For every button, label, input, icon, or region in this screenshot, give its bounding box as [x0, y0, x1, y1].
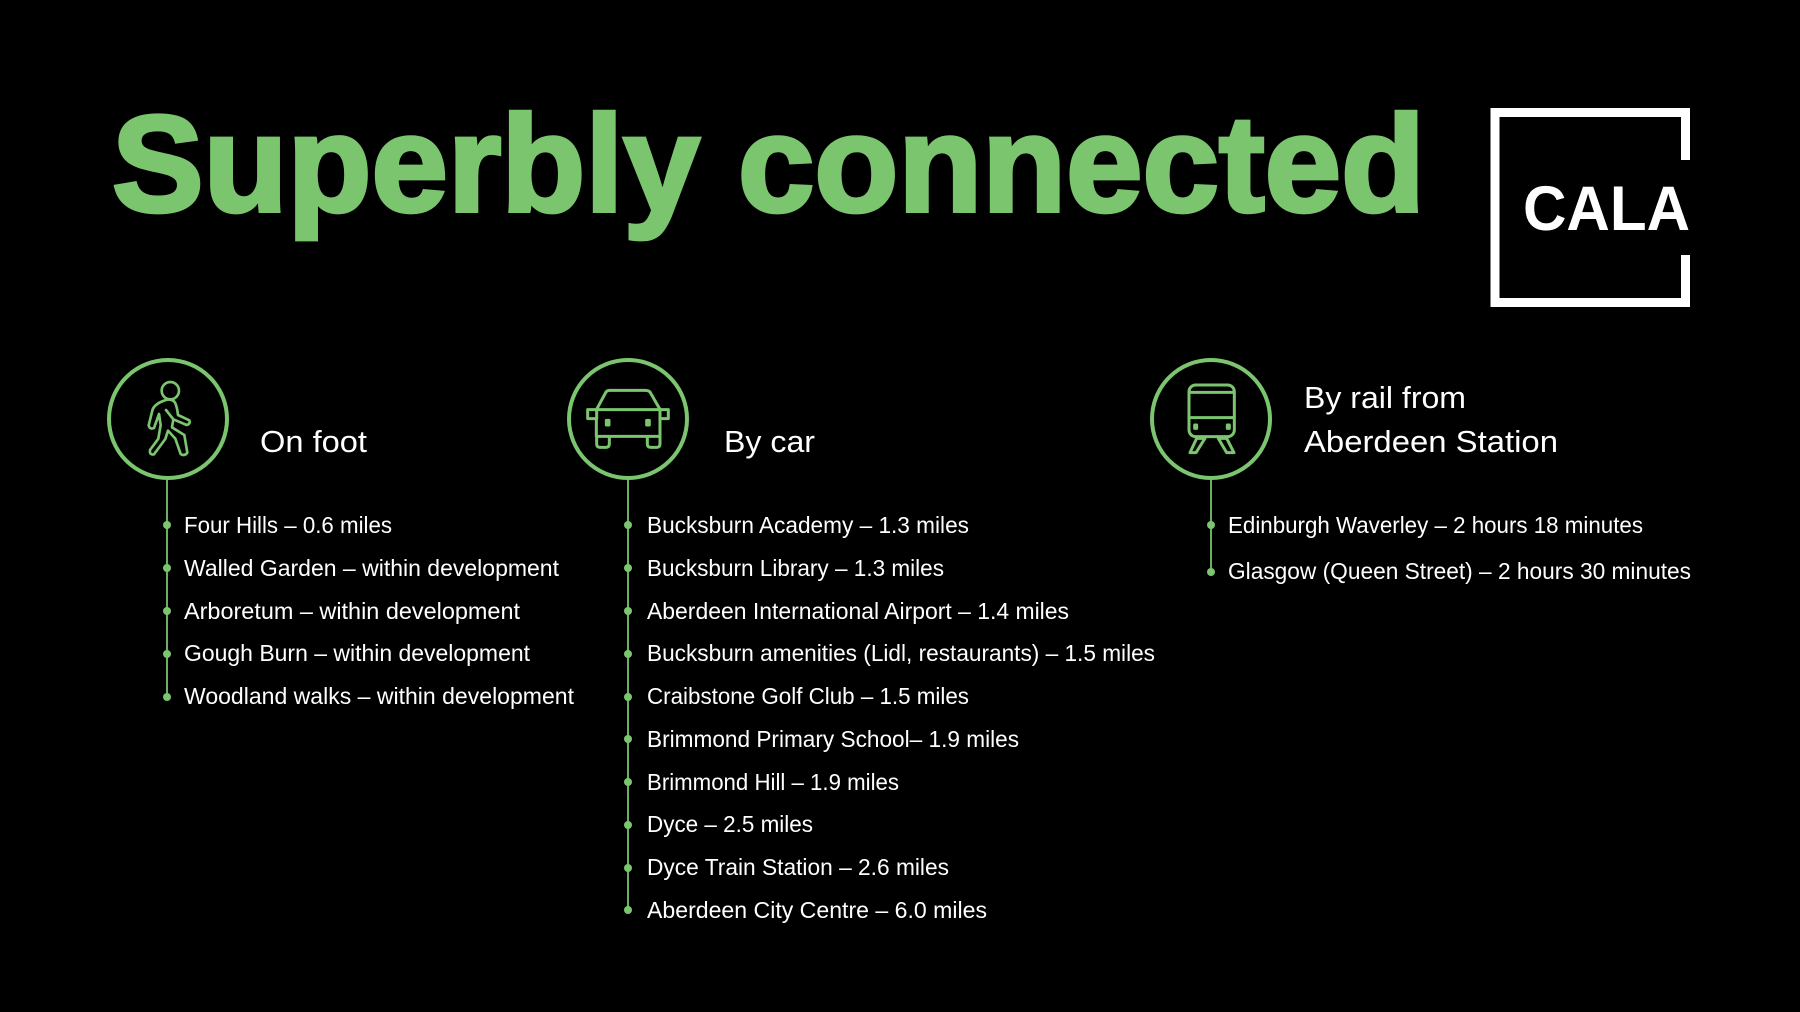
heading: by car: By car: [724, 424, 815, 459]
list: by car destinations: Bucksburn amenities (Lidl, restaurants) – 1.5 miles: [647, 640, 1155, 666]
list: on foot destinations: Woodland walks – within development: [184, 683, 575, 709]
list: by car destinations: Brimmond Hill – 1.9 miles: [647, 769, 899, 795]
list: on foot destinations: Four Hills – 0.6 miles: [184, 512, 392, 538]
list: on foot destinations: Arboretum – within development: [184, 598, 521, 624]
list: by car destinations: Aberdeen International Airport – 1.4 miles: [647, 598, 1069, 624]
heading: by rail: Aberdeen Station: [1304, 424, 1558, 459]
list: by car destinations: Bucksburn Academy – 1.3 miles: [647, 512, 969, 538]
logo: CALA: CALA: [1523, 174, 1690, 244]
list: by car destinations: Brimmond Primary School– 1.9 miles: [647, 726, 1019, 752]
list: on foot destinations: Walled Garden – within development: [184, 555, 560, 581]
list: rail destinations: Glasgow (Queen Street) – 2 hours 30 minutes: [1228, 558, 1691, 584]
panel: by rail: [1152, 360, 1691, 584]
icon: train: [1152, 360, 1270, 478]
list: by car destinations: Craibstone Golf Club – 1.5 miles: [647, 683, 969, 709]
timeline: by rail: [1207, 480, 1215, 576]
heading: on foot: On foot: [260, 424, 367, 459]
title: Superbly connected: [112, 88, 1425, 241]
heading: by rail: [1304, 380, 1558, 459]
list: by car destinations: Dyce – 2.5 miles: [647, 811, 813, 837]
panel: by car: [569, 360, 1155, 923]
list: by car destinations: [647, 512, 1155, 923]
icon: car: [569, 360, 687, 478]
timeline: by car: [624, 480, 632, 914]
list: rail destinations: [1228, 512, 1691, 584]
list: rail destinations: Edinburgh Waverley – 2 hours 18 minutes: [1228, 512, 1643, 538]
list: on foot destinations: [184, 512, 575, 709]
list: by car destinations: Aberdeen City Centre – 6.0 miles: [647, 897, 987, 923]
panel: on foot: [109, 360, 575, 709]
heading: by rail: By rail from: [1304, 380, 1466, 415]
list: on foot destinations: Gough Burn – within development: [184, 640, 531, 666]
icon: walking person: [109, 360, 227, 478]
logo: CALA: [1495, 112, 1690, 302]
timeline: on foot: [163, 480, 171, 701]
list: by car destinations: Dyce Train Station – 2.6 miles: [647, 854, 949, 880]
list: by car destinations: Bucksburn Library – 1.3 miles: [647, 555, 944, 581]
